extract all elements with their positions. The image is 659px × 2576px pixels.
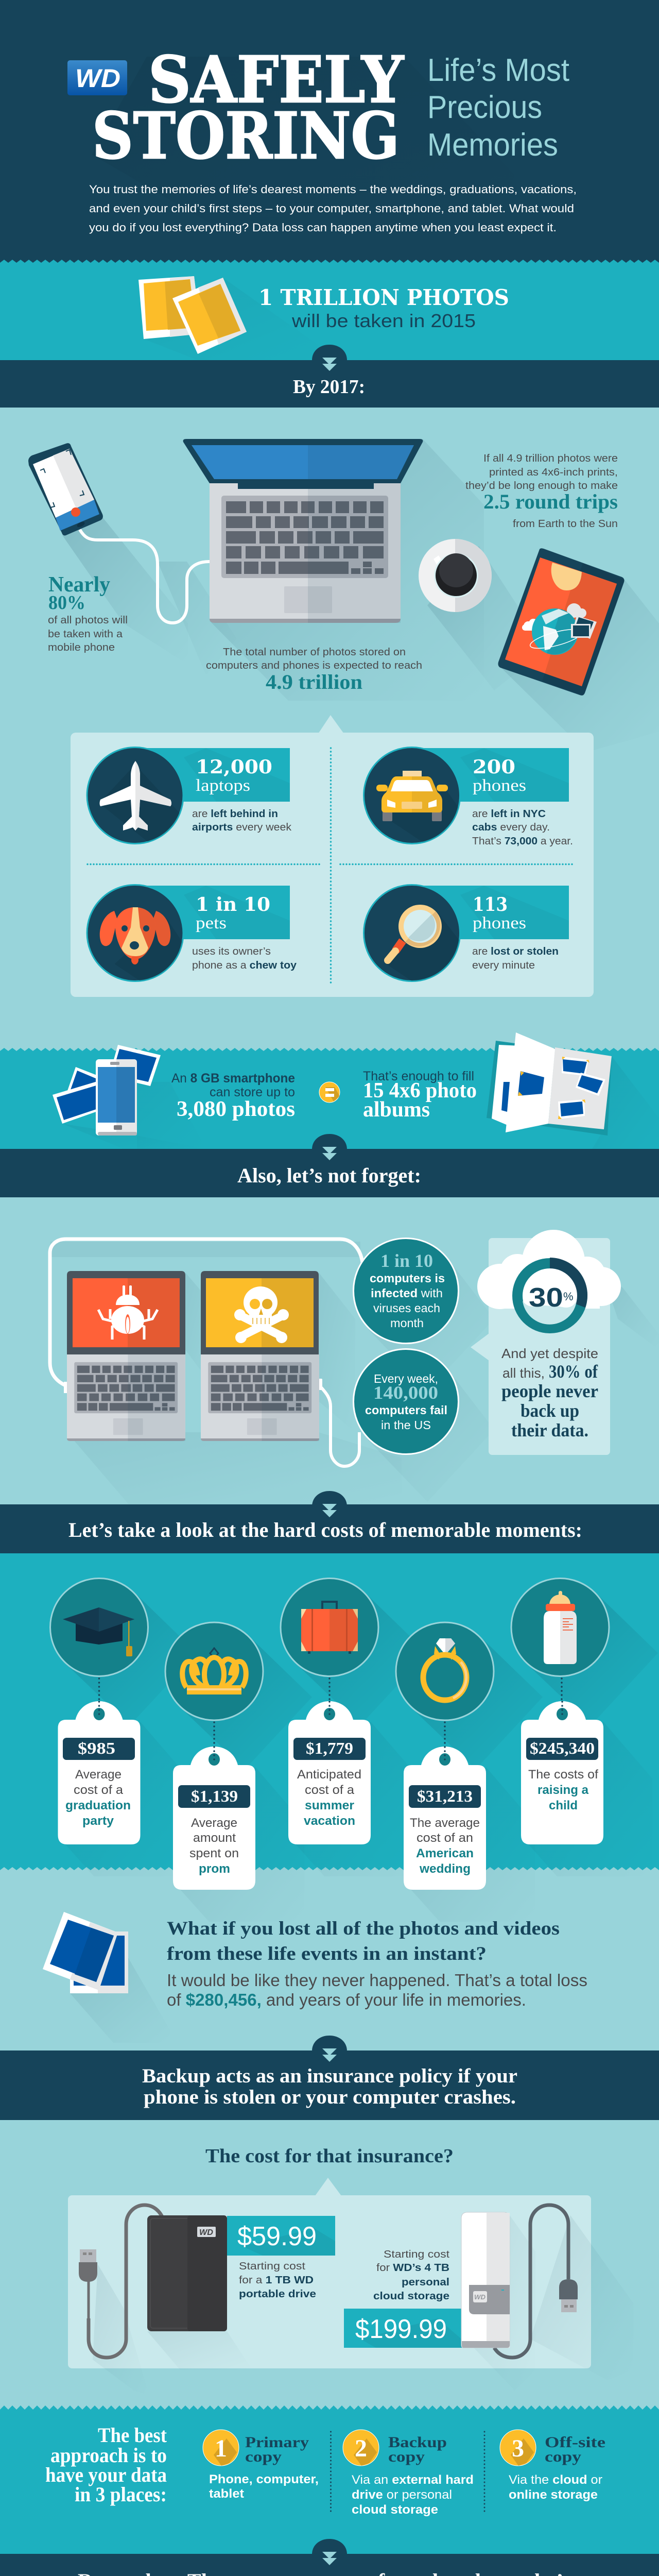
card: 30% never back up: 30% of <box>549 1361 598 1382</box>
text: 8 GB smartphone: can store up to <box>210 1085 295 1099</box>
cost item: prom: prom <box>199 1862 230 1876</box>
cable <box>50 1239 362 1385</box>
cost item: prom: $1,139 <box>191 1787 238 1805</box>
cost item: raising a child: $245,340 <box>530 1739 595 1757</box>
subtitle: Life’s Most <box>427 53 569 88</box>
icon: bug <box>98 1285 158 1340</box>
panel: smartphone storage equals albums <box>53 1032 659 1149</box>
card: 30% never back up <box>471 1230 659 1455</box>
cost item: summer vacation: summer <box>305 1799 354 1812</box>
card: 30% never back up: people never <box>501 1381 598 1401</box>
text: Nearly 80%: of all photos will <box>48 615 128 626</box>
callout: 1 in 10 computers: viruses each <box>373 1301 440 1315</box>
price tag: $199.99: personal <box>402 2277 449 2288</box>
panel: insurance prices <box>68 2178 633 2396</box>
panel: what if you lost <box>43 1912 587 2043</box>
price tag: $199.99: Starting cost <box>384 2249 449 2260</box>
coffee cup <box>419 539 492 612</box>
callout: 140,000 computers: computers fail <box>365 1403 447 1417</box>
text: best approach: have your data <box>45 2463 167 2486</box>
text: Nearly 80%: be taken with a <box>48 629 123 640</box>
stat: lost or stolen phones: phones <box>473 914 526 933</box>
item: primary copy: copy <box>245 2448 282 2465</box>
card: 30% never back up: And yet despite <box>501 1346 598 1361</box>
text: of $280,456, and years of your life in memories. <box>167 1990 526 2009</box>
price tag: $199.99: $199.99 <box>355 2314 447 2344</box>
text: total photos: computers and phones is expected to reach <box>206 660 422 671</box>
text: round trips: from Earth to the Sun <box>513 518 618 530</box>
subtitle <box>427 53 569 163</box>
icon: ring <box>423 1638 466 1700</box>
arrow tab <box>312 345 347 371</box>
title: Safely Storing: STORING <box>92 99 400 174</box>
arrow tab <box>312 1491 347 1517</box>
item: off-site copy: 3 <box>512 2435 524 2462</box>
icon: cloud drive with cable: WD <box>474 2293 486 2301</box>
item: backup copy <box>343 2430 474 2517</box>
icon: photo album <box>487 1032 612 1136</box>
stat: laptops: are left behind in <box>192 808 278 820</box>
stat: pets: 1 in 10 <box>196 894 270 916</box>
item: backup copy: copy <box>388 2448 425 2465</box>
text: round trips: they’d be long enough to make <box>465 480 618 492</box>
cost item: graduation party: party <box>82 1814 114 1828</box>
text: total photos: The total number of photos stored on <box>223 647 406 658</box>
price tag: $59.99: Starting cost <box>239 2261 306 2272</box>
cost item: summer vacation: vacation <box>304 1814 355 1828</box>
stat: taxi phones: phones <box>473 776 526 795</box>
price tag: $199.99 <box>344 2249 467 2348</box>
callout: 140,000 computers: 140,000 <box>373 1382 438 1403</box>
icon: skull <box>234 1286 289 1343</box>
intro text: and even your child’s first steps – to your computer, smartphone, and tablet. What would <box>89 202 574 215</box>
stat: laptops: 12,000 <box>196 756 272 778</box>
item: primary copy: Phone, computer, <box>209 2472 319 2486</box>
text: 8 GB smartphone: 3,080 photos <box>177 1097 295 1121</box>
card: 30% never back up: back up <box>521 1400 579 1421</box>
item: primary copy: tablet <box>209 2487 244 2501</box>
cost item: summer vacation: cost of a <box>305 1783 355 1797</box>
stat: taxi phones: are left in NYC <box>472 808 546 820</box>
text: best approach: approach is to <box>50 2444 167 2467</box>
stat: laptops <box>87 747 292 852</box>
cost item: prom: spent on <box>189 1846 239 1860</box>
cost item: raising a child: The costs of <box>528 1768 598 1782</box>
item: off-site copy: online storage <box>509 2488 598 2502</box>
cost item: graduation party: Average <box>75 1768 122 1782</box>
cost item: prom <box>165 1622 312 1922</box>
item: backup copy: Via an external hard <box>352 2473 474 2487</box>
text: total photos <box>206 647 422 693</box>
arrow tab <box>312 1134 347 1160</box>
text: round trips <box>465 453 618 530</box>
cost item: graduation party: $985 <box>78 1739 115 1757</box>
icon: portable drive with cable <box>79 2205 227 2358</box>
panel: cost of memorable moments <box>50 1579 658 1922</box>
intro text: You trust the memories of life’s dearest moments – the weddings, graduations, vacations, <box>89 183 577 196</box>
icon: taxi <box>363 747 460 844</box>
stat: lost or stolen phones: are lost or stolen <box>472 946 559 957</box>
text: best approach: in 3 places: <box>75 2483 167 2506</box>
heading: hard costs: Let’s take a look at the hard costs of memorable moments: <box>68 1518 582 1541</box>
stat: laptops: airports every week <box>192 822 292 833</box>
arrow tab <box>312 2539 347 2565</box>
logo: WD: WD <box>75 64 120 93</box>
callout: 1 in 10 computers <box>353 1239 494 1391</box>
cost item: graduation party: graduation <box>65 1799 131 1812</box>
icon: yellow photos <box>138 276 247 354</box>
text: 8 GB smartphone <box>171 1071 295 1121</box>
price tag: $199.99: cloud storage <box>373 2291 449 2302</box>
item: backup copy: 2 <box>355 2435 367 2462</box>
card: 30% never back up: all this, <box>502 1365 545 1381</box>
icon: blue photos <box>43 1912 128 1993</box>
cost item: American wedding: American <box>416 1846 474 1860</box>
item: backup copy: Backup <box>388 2434 447 2451</box>
item: off-site copy <box>500 2430 605 2502</box>
heading: backup <box>142 2065 517 2108</box>
price tag: $59.99: for a 1 TB WD <box>239 2275 314 2286</box>
text: photo albums: 15 4x6 photo <box>363 1079 477 1103</box>
text: 8 GB smartphone: An 8 GB smartphone <box>171 1071 295 1086</box>
heading: backup: Backup acts as an insurance policy if your <box>142 2065 517 2087</box>
text: Nearly 80%: Nearly <box>48 573 110 597</box>
icon: cloud with 30 percent donut <box>477 1230 621 1333</box>
intro text: you do if you lost everything? Data loss can happen anytime when you least expect it. <box>89 221 557 234</box>
item: off-site copy: Off-site <box>545 2434 605 2451</box>
heading: also, let's not forget: Also, let’s not forget: <box>237 1164 421 1187</box>
title: Safely Storing: SAFELY <box>148 43 404 117</box>
icon: suitcase <box>301 1602 358 1654</box>
intro text <box>89 183 577 234</box>
heading: will be taken in 2015 <box>291 310 476 331</box>
laptop: virus <box>67 1271 185 1441</box>
heading <box>258 285 509 331</box>
subtitle: Precious <box>427 90 542 125</box>
icon: airplane <box>86 747 184 844</box>
item: backup copy: drive or personal <box>352 2488 452 2502</box>
stat: pets: phone as a chew toy <box>192 960 297 971</box>
laptop <box>183 439 423 623</box>
icon: cloud with 30 percent donut: % <box>563 1290 574 1303</box>
cost item: American wedding: The average <box>410 1816 480 1830</box>
icon: equals <box>319 1082 340 1103</box>
cost item: American wedding: cost of an <box>417 1831 473 1845</box>
cable <box>80 530 210 623</box>
item: off-site copy: Via the cloud or <box>509 2473 602 2487</box>
heading: 1 TRILLION PHOTOS <box>258 285 509 310</box>
stat: taxi phones: cabs every day. <box>472 822 550 833</box>
cost item: American wedding: wedding <box>419 1862 471 1876</box>
callout: 140,000 computers: Every week, <box>374 1372 438 1385</box>
stat: lost or stolen phones: every minute <box>472 960 535 971</box>
text: photo albums: albums <box>363 1098 430 1122</box>
icon: smartphone with photos <box>53 1045 161 1136</box>
icon: magnifying glass <box>363 884 460 982</box>
stat: lost or stolen phones: 113 <box>473 894 508 916</box>
price tag: $59.99: $59.99 <box>237 2222 317 2251</box>
stat: taxi phones: 200 <box>473 756 515 778</box>
icon: baby bottle <box>544 1591 577 1664</box>
text: Nearly 80% <box>48 573 128 653</box>
text: round trips: 2.5 round trips <box>483 490 618 513</box>
price tag: $59.99 <box>227 2216 335 2300</box>
panel: 1 trillion photos <box>138 276 509 360</box>
cost item: graduation party: cost of a <box>74 1783 124 1797</box>
cost item: summer vacation: Anticipated <box>297 1768 361 1782</box>
heading: cost for insurance: The cost for that insurance? <box>205 2145 454 2167</box>
cost item: graduation party <box>50 1579 197 1876</box>
stat: pets <box>86 884 297 982</box>
callout: 140,000 computers <box>353 1349 494 1502</box>
stat: pets: pets <box>196 914 227 933</box>
cost item: American wedding: $31,213 <box>417 1787 473 1805</box>
illustration: laptop with phone, coffee and tablet <box>28 439 659 752</box>
item: primary copy: 1 <box>215 2435 227 2462</box>
heading: By 2017: By 2017: <box>293 376 365 398</box>
text <box>167 1918 587 2009</box>
icon: dog <box>86 884 184 982</box>
subtitle: Memories <box>427 127 558 163</box>
text: total photos: 4.9 trillion <box>266 670 362 693</box>
text: best approach: The best <box>98 2424 167 2447</box>
text: It would be like they never happened. That’s a total loss <box>167 1971 587 1990</box>
text: round trips: If all 4.9 trillion photos were <box>483 453 618 464</box>
title header <box>67 43 577 234</box>
text: photo albums: That’s enough to fill <box>363 1069 474 1083</box>
price tag: $59.99: portable drive <box>239 2289 316 2300</box>
panel: three places <box>45 2424 605 2517</box>
panel: infected laptops <box>50 1230 659 1504</box>
item: primary copy <box>203 2430 319 2501</box>
icon: crown <box>182 1648 246 1691</box>
cost item: prom: Average <box>191 1816 237 1830</box>
text: photo albums <box>363 1069 477 1122</box>
callout: 1 in 10 computers: month <box>390 1316 424 1330</box>
stat: pets: uses its owner’s <box>192 946 271 957</box>
text: from these life events in an instant? <box>167 1943 487 1964</box>
cost item: raising a child: child <box>549 1799 578 1812</box>
item: backup copy: cloud storage <box>352 2503 438 2517</box>
text: Nearly 80%: mobile phone <box>48 642 115 653</box>
callout: 1 in 10 computers: computers is <box>370 1272 445 1285</box>
cost item: summer vacation <box>281 1579 427 1876</box>
tablet <box>498 548 625 696</box>
callout: 1 in 10 computers: infected with <box>371 1286 443 1300</box>
price tag: $199.99: for WD’s 4 TB <box>376 2262 449 2274</box>
cost item: raising a child <box>511 1579 658 1876</box>
logo: WD <box>67 60 127 95</box>
cost item: prom: amount <box>193 1831 236 1845</box>
stat: taxi phones: That’s 73,000 a year. <box>472 836 573 847</box>
cost item: summer vacation: $1,779 <box>306 1739 353 1757</box>
icon: phone <box>28 443 103 535</box>
card: 30% never back up: their data. <box>511 1420 588 1440</box>
callout: 140,000 computers: in the US <box>381 1418 431 1432</box>
icon: portable drive with cable: WD <box>199 2228 213 2237</box>
icon: cloud with 30 percent donut: 30 <box>529 1283 563 1313</box>
cost item: American wedding <box>396 1622 543 1922</box>
icon: cloud drive with cable <box>461 2205 578 2358</box>
heading: backup: phone is stolen or your computer crashes. <box>144 2086 516 2108</box>
item: off-site copy: copy <box>545 2448 581 2465</box>
text: round trips: printed as 4x6-inch prints, <box>489 467 618 478</box>
text: Nearly 80%: 80% <box>48 592 85 614</box>
stat: lost or stolen phones <box>363 884 569 982</box>
callout: 1 in 10 computers: 1 in 10 <box>380 1250 433 1271</box>
text: best approach <box>45 2424 167 2506</box>
text: What if you lost all of the photos and videos <box>167 1918 560 1939</box>
title: Safely Storing <box>92 43 404 174</box>
item: primary copy: Primary <box>245 2434 309 2451</box>
icon: graduation cap <box>63 1607 134 1656</box>
arrow tab <box>312 2036 347 2062</box>
stat: laptops: laptops <box>196 776 250 795</box>
cost item: raising a child: raising a <box>537 1783 589 1797</box>
stat: taxi phones <box>363 747 573 852</box>
laptop: malware skull <box>201 1271 319 1441</box>
panel: lost devices stats <box>71 715 594 997</box>
